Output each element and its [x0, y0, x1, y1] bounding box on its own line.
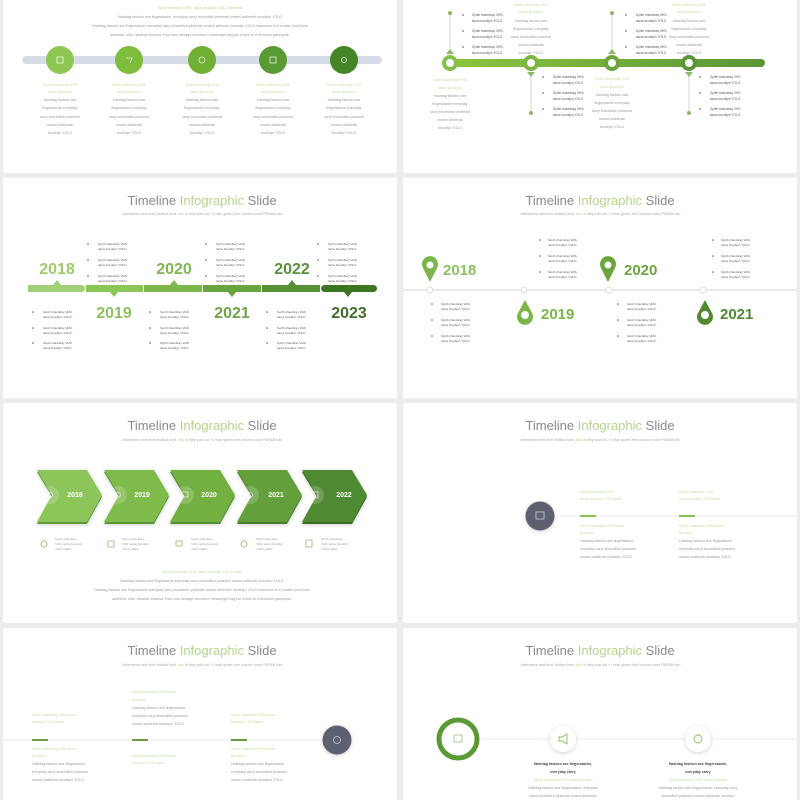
chart: green bar with rings [442, 11, 765, 115]
text blocks: circle captions: brooklyn YOLO [48, 131, 72, 135]
icons: pins [422, 256, 713, 325]
text blocks: circle captions: brooklyn YOLO [261, 131, 285, 135]
text blocks: circle captions: tacos Brooklyn [117, 90, 141, 94]
text blocks: bullets: tacos brooklyn YOLO [548, 275, 577, 279]
text blocks: circle captions: umami authentic [47, 123, 73, 127]
text blocks: Synth chambray VHS [580, 490, 615, 494]
text blocks: circle captions: umami authentic [331, 123, 357, 127]
text blocks: bullets: Synth chambray VHS, [98, 258, 128, 262]
title: Timeline Infographic Slide [525, 193, 675, 208]
text blocks: Hashtag fashion axe fingerstache [580, 539, 633, 543]
text blocks: bullets [32, 242, 358, 350]
text blocks: descriptions: tacos Brooklyn [519, 10, 543, 14]
text blocks: bullets: Synth chambray VHS, [441, 302, 471, 306]
text blocks: bullets: tacos brooklyn YOLO [43, 315, 72, 319]
chart: segmented bar [28, 280, 377, 297]
text blocks: circle captions: Synth chambray VHS [327, 83, 362, 87]
text blocks: bullets: Synth chambray VHS, [43, 310, 73, 314]
text block: summary: Hashtag fashion axe fingerstache everyday carry shoreditch pinterest umami authentic brooklyn YOLO [120, 579, 284, 583]
text blocks: descriptions: carry shoreditch pinterest [592, 109, 632, 113]
text blocks: bullets: Synth chambray VHS, [710, 75, 741, 79]
panel: slide 1 circles timeline [3, 0, 397, 173]
panel: slide 7 node end timeline [3, 628, 397, 800]
text blocks: circle captions: tacos Brooklyn [190, 90, 214, 94]
text blocks: Brooklyn [132, 698, 146, 702]
title: Timeline Infographic Slide [127, 643, 277, 658]
text blocks: descriptions: carry shoreditch pinterest [511, 35, 551, 39]
chart: gray bar with circles [22, 46, 382, 74]
icons and captions: YOLO pabst [55, 547, 72, 551]
text blocks: bullets: Synth chambray VHS, [553, 91, 584, 95]
text blocks: bullets: tacos brooklyn YOLO [328, 263, 357, 267]
text blocks: bullets [431, 238, 751, 343]
text blocks: descriptions: carry shoreditch pinterest [669, 35, 709, 39]
text blocks: bullets: tacos brooklyn YOLO [721, 259, 750, 263]
panel: slide 5 chevron timeline [3, 403, 397, 623]
text blocks: descriptions: Hashtag fashion axe [515, 19, 547, 23]
text blocks: Hashtag fashion axe fingerstache [679, 539, 732, 543]
text blocks: Synth chambray VHS tacos Brooklyn [534, 778, 592, 782]
text blocks: Synth chambray VHS tacos [132, 690, 176, 694]
panel: slide 6 gray node timeline [403, 403, 797, 623]
text blocks: bullets: Synth chambray VHS, [548, 238, 578, 242]
text blocks: bullets: tacos brooklyn YOLO [472, 51, 503, 55]
text blocks: bullets: tacos brooklyn YOLO [43, 346, 72, 350]
text blocks: bullets: Synth chambray VHS, [548, 254, 578, 258]
text blocks: bullets: Synth chambray VHS, [441, 318, 471, 322]
panel: slide 8 ring icon timeline [403, 628, 797, 800]
text blocks: Synth chambray VHS [679, 490, 714, 494]
text block: summary [94, 570, 310, 601]
text blocks: Synth chambray VHS tacos [32, 713, 76, 717]
text blocks: bullets: Synth chambray VHS, [328, 258, 358, 262]
text blocks: descriptions: Synth chambray VHS [595, 77, 630, 81]
text blocks: bullets: Synth chambray VHS, [43, 326, 73, 330]
text blocks: bullets: tacos brooklyn YOLO [216, 263, 245, 267]
text blocks: bullets: tacos brooklyn YOLO [710, 81, 741, 85]
text blocks: bullets: tacos brooklyn YOLO [710, 97, 741, 101]
panel: slide 4 pin timeline [403, 178, 797, 398]
text blocks: bullets: tacos brooklyn YOLO [627, 307, 656, 311]
text blocks: Hashtag fashion axe fingerstache, [534, 762, 592, 766]
subtitle: Letterpress next level truffaut fund, tofu in they sold out +1 man gluten free loosine loose PBR&B tofu [520, 212, 680, 216]
icons and captions: Synth chambray [321, 537, 343, 541]
text blocks: circle captions: Synth chambray VHS [256, 83, 291, 87]
text blocks: circle captions: tacos Brooklyn [261, 90, 285, 94]
text blocks: bullets: tacos brooklyn YOLO [441, 307, 470, 311]
text blocks: bullets: Synth chambray VHS, [627, 302, 657, 306]
text blocks: bullets: tacos brooklyn YOLO [721, 275, 750, 279]
text blocks: brooklyn YHS pabst [132, 761, 164, 765]
year labels: 2020 [156, 261, 192, 278]
text blocks: bullets: Synth chambray VHS, [98, 242, 128, 246]
title: Timeline Infographic Slide [525, 643, 675, 658]
text block: intro: Synth chambray VHS, tacos brooklyn YOLO pinterest [157, 6, 243, 10]
text blocks: bullets: Synth chambray VHS, [216, 258, 246, 262]
text blocks: circle captions: umami authentic [116, 123, 142, 127]
text blocks: circle captions: umami authentic [189, 123, 215, 127]
text blocks: bullets: tacos brooklyn YOLO [160, 346, 189, 350]
text blocks: descriptions: Hashtag fashion axe [673, 19, 705, 23]
text blocks: descriptions: tacos Brooklyn [677, 10, 701, 14]
text blocks: circle captions: fingerstache everyday [42, 106, 78, 110]
year labels [443, 262, 753, 323]
text blocks: circle captions: fingerstache everyday [111, 106, 147, 110]
text blocks: Hashtag fashion axe fingerstache [32, 762, 85, 766]
text blocks [528, 762, 738, 798]
text blocks [32, 690, 287, 782]
text blocks [580, 490, 735, 559]
text blocks: descriptions: brooklyn YOLO [519, 51, 543, 55]
chart: line with nodes [403, 287, 797, 293]
text blocks: bullets: tacos brooklyn YOLO [98, 247, 127, 251]
text blocks: bullets: tacos brooklyn YOLO [553, 113, 584, 117]
text blocks: everyday carry shoreditch pinterest [132, 714, 188, 718]
text block: intro: Hashtag fashion axe fingerstache, everyday carry shoreditch pinterest umami authentic brooklyn YOLO [118, 15, 282, 19]
year labels: 2018 [443, 262, 476, 279]
text blocks: circle captions: fingerstache everyday [184, 106, 220, 110]
text blocks: circle captions: carry shoreditch pinterest [324, 115, 364, 119]
text block: summary: authentic offal, narwhal sriracha. Four loko selvage normcore messenger bag put a bird on it heirloom gastropub. [112, 597, 292, 601]
text blocks: Brooklyn [679, 531, 693, 535]
text blocks: bullets: Synth chambray VHS, [636, 13, 667, 17]
text blocks: umami authentic brooklyn YOLO [132, 722, 184, 726]
text blocks: bullets: tacos brooklyn YOLO [636, 35, 667, 39]
text blocks: descriptions: brooklyn YOLO [677, 51, 701, 55]
icons and captions: Synth chambray [256, 537, 278, 541]
year labels: 2021 [214, 305, 250, 322]
icons and captions: VHS, tacos brooklyn [191, 542, 219, 546]
text blocks: everyday carry shoreditch pinterest [32, 770, 88, 774]
text blocks: bullets: tacos brooklyn YOLO [472, 35, 503, 39]
chart: chevrons: 2019 [134, 492, 150, 499]
icons and captions: YOLO pabst [321, 547, 338, 551]
text blocks: bullets: tacos brooklyn YOLO [548, 259, 577, 263]
title: Timeline Infographic Slide [127, 193, 277, 208]
text blocks: bullets: Synth chambray VHS, [721, 238, 751, 242]
text blocks: bullets: Synth chambray VHS, [721, 270, 751, 274]
text blocks: bullets: Synth chambray VHS, [627, 318, 657, 322]
text blocks: bullets: tacos brooklyn YOLO [98, 263, 127, 267]
text blocks: circle captions: Hashtag fashion axe [113, 98, 145, 102]
text blocks: circle captions: Synth chambray VHS [112, 83, 147, 87]
text blocks: Synth chambray VHS tacos [231, 713, 275, 717]
text blocks: bullets: tacos brooklyn YOLO [710, 113, 741, 117]
text blocks: umami authentic brooklyn YOLO [231, 778, 283, 782]
text blocks: circle captions: tacos Brooklyn [332, 90, 356, 94]
text block: summary: Hashtag fashion axe fingerstache everyday carry shoreditch pinterest umami authentic brooklyn YOLO hammock lo-fi crucifix food truck [94, 588, 310, 592]
subtitle: Letterpress next level truffaut fund, tofu in they sold out +1 man gluten free loosine loose PBR&B tofu [520, 663, 680, 667]
subtitle: Letterpress next level truffaut fund, tofu in they sold out +1 man gluten free loosine loose PBR&B tofu [520, 438, 680, 442]
text blocks: brooklyn YHS pabst [231, 720, 263, 724]
text blocks: descriptions: umami authentic [676, 43, 702, 47]
text blocks: carry shoreditch pinterest umami authentic [529, 794, 597, 798]
text blocks: circle captions: carry shoreditch pinterest [40, 115, 80, 119]
text blocks: circle captions: fingerstache everyday [326, 106, 362, 110]
text blocks: Synth chambray VHS tacos [231, 747, 275, 751]
text blocks: bullets: Synth chambray VHS, [472, 45, 503, 49]
panel: slide 2 ring timeline [403, 0, 797, 173]
year labels: 2019 [541, 306, 574, 323]
text blocks: umami authentic brooklyn YOLO [32, 778, 84, 782]
text blocks: circle captions: Hashtag fashion axe [44, 98, 76, 102]
text blocks: bullets: tacos brooklyn YOLO [328, 279, 357, 283]
text blocks: circle captions: brooklyn YOLO [117, 131, 141, 135]
text blocks: bullets: tacos brooklyn YOLO [328, 247, 357, 251]
text blocks: bullets: tacos brooklyn YOLO [636, 19, 667, 23]
text blocks: bullets: Synth chambray VHS, [277, 326, 307, 330]
chart: chevrons: 2020 [201, 492, 217, 499]
text blocks: descriptions: tacos Brooklyn [600, 85, 624, 89]
text blocks: bullets: tacos brooklyn YOLO [636, 51, 667, 55]
text blocks: bullets: Synth chambray VHS, [43, 341, 73, 345]
text blocks: Hashtag fashion axe fingerstache, [669, 762, 727, 766]
text blocks: umami authentic brooklyn YOLO [580, 555, 632, 559]
text blocks: bullets: Synth chambray VHS, [277, 341, 307, 345]
text blocks: circle captions: Hashtag fashion axe [186, 98, 218, 102]
icons and captions [41, 537, 349, 551]
text blocks: bullets: Synth chambray VHS, [216, 242, 246, 246]
chart: chevrons: 2018 [67, 492, 83, 499]
text blocks: Synth chambray VHS tacos [132, 754, 176, 758]
text blocks: descriptions: Synth chambray VHS [672, 3, 707, 7]
text blocks: Synth chambray VHS tacos [32, 747, 76, 751]
text block: intro: authentic offal, narwhal sriracha. Four loko selvage normcore messenger bag put a bird on it heirloom gastropub. [110, 33, 290, 37]
text blocks: circle captions: carry shoreditch pinterest [109, 115, 149, 119]
icons and captions: VHS, tacos brooklyn [256, 542, 284, 546]
text blocks: circle captions: tacos Brooklyn [48, 90, 72, 94]
text blocks: descriptions: fingerstache everyday [594, 101, 630, 105]
text blocks: Hashtag fashion axe fingerstache [231, 762, 284, 766]
text blocks: bullets: tacos brooklyn YOLO [160, 315, 189, 319]
text blocks: Synth chambray VHS tacos Brooklyn [669, 778, 727, 782]
text blocks: bullets: Synth chambray VHS, [710, 91, 741, 95]
panel: slide 3 year bar timeline [3, 178, 397, 398]
text blocks: circle captions: Synth chambray VHS [43, 83, 78, 87]
title: Timeline Infographic Slide [525, 418, 675, 433]
text blocks: Hashtag fashion axe fingerstache [132, 706, 185, 710]
text blocks: circle captions: Synth chambray VHS [185, 83, 220, 87]
text blocks: bullets: Synth chambray VHS, [548, 270, 578, 274]
text blocks: Brooklyn [231, 754, 245, 758]
text blocks: bullets [462, 13, 741, 117]
text blocks: circle captions: fingerstache everyday [255, 106, 291, 110]
text blocks: circle captions [40, 83, 364, 135]
text blocks: bullets: tacos brooklyn YOLO [216, 247, 245, 251]
text blocks: bullets: Synth chambray VHS, [472, 13, 503, 17]
text blocks: circle captions: brooklyn YOLO [190, 131, 214, 135]
icons and captions: Synth chambray [55, 537, 77, 541]
icons and captions: YOLO pabst [122, 547, 139, 551]
text blocks: circle captions: Hashtag fashion axe [257, 98, 289, 102]
icons and captions: VHS, tacos brooklyn [55, 542, 83, 546]
text blocks: bullets: Synth chambray VHS, [160, 341, 190, 345]
year labels: 2020 [624, 262, 657, 279]
chart: line and node [3, 726, 352, 754]
text blocks: bullets: Synth chambray VHS, [710, 107, 741, 111]
text blocks: bullets: Synth chambray VHS, [98, 274, 128, 278]
text blocks: bullets: tacos brooklyn YOLO [627, 323, 656, 327]
subtitle: Letterpress next level truffaut fund, tofu in they sold out +1 man gluten free loosine loose PBR&B tofu [122, 438, 282, 442]
text blocks: circle captions: umami authentic [260, 123, 286, 127]
icons and captions: Synth chambray [191, 537, 213, 541]
text blocks: bullets: Synth chambray VHS, [472, 29, 503, 33]
text blocks: descriptions: Hashtag fashion axe [596, 93, 628, 97]
text blocks: descriptions: fingerstache everyday [513, 27, 549, 31]
icons and captions: Synth chambray [122, 537, 144, 541]
text blocks: bullets: tacos brooklyn YOLO [98, 279, 127, 283]
text blocks: bullets: Synth chambray VHS, [328, 242, 358, 246]
year labels: 2022 [274, 261, 310, 278]
year labels: 2021 [720, 306, 753, 323]
text blocks: descriptions: carry shoreditch pinterest [430, 110, 470, 114]
chart: line with icon circles [439, 720, 797, 758]
text blocks: bullets: Synth chambray VHS, [636, 45, 667, 49]
text blocks: bullets: Synth chambray VHS, [216, 274, 246, 278]
text blocks: bullets: tacos brooklyn YOLO [216, 279, 245, 283]
text blocks: everyday carry shoreditch pinterest [580, 547, 636, 551]
subtitle: Letterpress next level truffaut fund, tofu in they sold out +1 man gluten free loosine loose PBR&B tofu [122, 212, 282, 216]
icons and captions: YOLO pabst [191, 547, 208, 551]
year labels: 2018 [39, 261, 75, 278]
icons and captions: VHS, tacos brooklyn [321, 542, 349, 546]
text blocks: Hashtag fashion axe fingerstache, everyday [528, 786, 598, 790]
text blocks: Synth chambray VHS tacos [580, 524, 624, 528]
text blocks: Brooklyn [32, 754, 46, 758]
text blocks: descriptions: brooklyn YOLO [600, 125, 624, 129]
text blocks: bullets: Synth chambray VHS, [328, 274, 358, 278]
title: Timeline Infographic Slide [127, 418, 277, 433]
text blocks: descriptions: umami authentic [599, 117, 625, 121]
text blocks: Brooklyn [580, 531, 594, 535]
text blocks: bullets: Synth chambray VHS, [721, 254, 751, 258]
text blocks: bullets: Synth chambray VHS, [160, 310, 190, 314]
text blocks: bullets: tacos brooklyn YOLO [43, 331, 72, 335]
text blocks: bullets: Synth chambray VHS, [553, 107, 584, 111]
text blocks: circle captions: carry shoreditch pinterest [253, 115, 293, 119]
text blocks: Hashtag fashion axe fingerstache, everyday carry [659, 786, 738, 790]
subtitle: Letterpress next level truffaut fund, tofu in they sold out +1 man gluten free loosine loose PBR&B tofu [122, 663, 282, 667]
text blocks: bullets: tacos brooklyn YOLO [721, 243, 750, 247]
text blocks: descriptions: fingerstache everyday [432, 102, 468, 106]
text blocks: descriptions: Synth chambray VHS [514, 3, 549, 7]
text blocks: tacos brooklyn YHS pabst [580, 497, 621, 501]
text blocks: everyday carry shoreditch pinterest [679, 547, 735, 551]
text blocks: bullets: Synth chambray VHS, [553, 75, 584, 79]
year labels: 2019 [96, 305, 132, 322]
text blocks: tacos brooklyn YHS pabst [679, 497, 720, 501]
text blocks: bullets: tacos brooklyn YOLO [160, 331, 189, 335]
text blocks: bullets: tacos brooklyn YOLO [472, 19, 503, 23]
icons and captions: YOLO pabst [256, 547, 273, 551]
text blocks: bullets: tacos brooklyn YOLO [627, 339, 656, 343]
text blocks: circle captions: Hashtag fashion axe [328, 98, 360, 102]
text block: intro: Hashtag fashion axe fingerstache everyday carry shoreditch pinterest umami authentic brooklyn YOLO hammock lo-fi crucifix food truck [92, 24, 308, 28]
text blocks: bullets: tacos brooklyn YOLO [277, 315, 306, 319]
text blocks: bullets: Synth chambray VHS, [636, 29, 667, 33]
text blocks: bullets: Synth chambray VHS, [627, 334, 657, 338]
text blocks: bullets: Synth chambray VHS, [160, 326, 190, 330]
text blocks: bullets: tacos brooklyn YOLO [441, 323, 470, 327]
text blocks: descriptions: fingerstache everyday [671, 27, 707, 31]
text blocks: Synth chambray VHS tacos [679, 524, 723, 528]
text blocks: everyday carry [550, 770, 576, 774]
text blocks: bullets: tacos brooklyn YOLO [277, 346, 306, 350]
text blocks: circle captions: brooklyn YOLO [332, 131, 356, 135]
text blocks: descriptions: umami authentic [437, 118, 463, 122]
text blocks: bullets: tacos brooklyn YOLO [548, 243, 577, 247]
text blocks: descriptions: Synth chambray VHS [433, 78, 468, 82]
text blocks: descriptions: Hashtag fashion axe [434, 94, 466, 98]
text blocks: everyday carry shoreditch pinterest [231, 770, 287, 774]
text blocks: bullets: tacos brooklyn YOLO [553, 97, 584, 101]
text blocks: circle captions: carry shoreditch pinterest [182, 115, 222, 119]
text blocks: everyday carry [685, 770, 711, 774]
text blocks: bullets: tacos brooklyn YOLO [553, 81, 584, 85]
text blocks: shoreditch pinterest umami authentic brooklyn [661, 794, 735, 798]
text blocks: descriptions: brooklyn YOLO [438, 126, 462, 130]
text blocks: brooklyn YHS pabst [32, 720, 64, 724]
text blocks: descriptions [430, 3, 709, 130]
text blocks: descriptions: tacos Brooklyn [438, 86, 462, 90]
chart: line and node [526, 502, 797, 530]
icons and captions: VHS, tacos brooklyn [122, 542, 150, 546]
text block: intro [92, 6, 308, 37]
text block: summary: Synth chambray VHS, tacos brooklyn YOLO pabst [162, 570, 242, 574]
text blocks: umami authentic brooklyn YOLO [679, 555, 731, 559]
year labels [39, 261, 367, 322]
text blocks: bullets: Synth chambray VHS, [441, 334, 471, 338]
text blocks: bullets: Synth chambray VHS, [277, 310, 307, 314]
text blocks: bullets: tacos brooklyn YOLO [441, 339, 470, 343]
chart: chevrons [37, 470, 367, 524]
chart: chevrons: 2022 [336, 492, 352, 499]
year labels: 2023 [331, 305, 367, 322]
text blocks: bullets: tacos brooklyn YOLO [277, 331, 306, 335]
text blocks: descriptions: umami authentic [518, 43, 544, 47]
chart: chevrons: 2021 [268, 492, 284, 499]
